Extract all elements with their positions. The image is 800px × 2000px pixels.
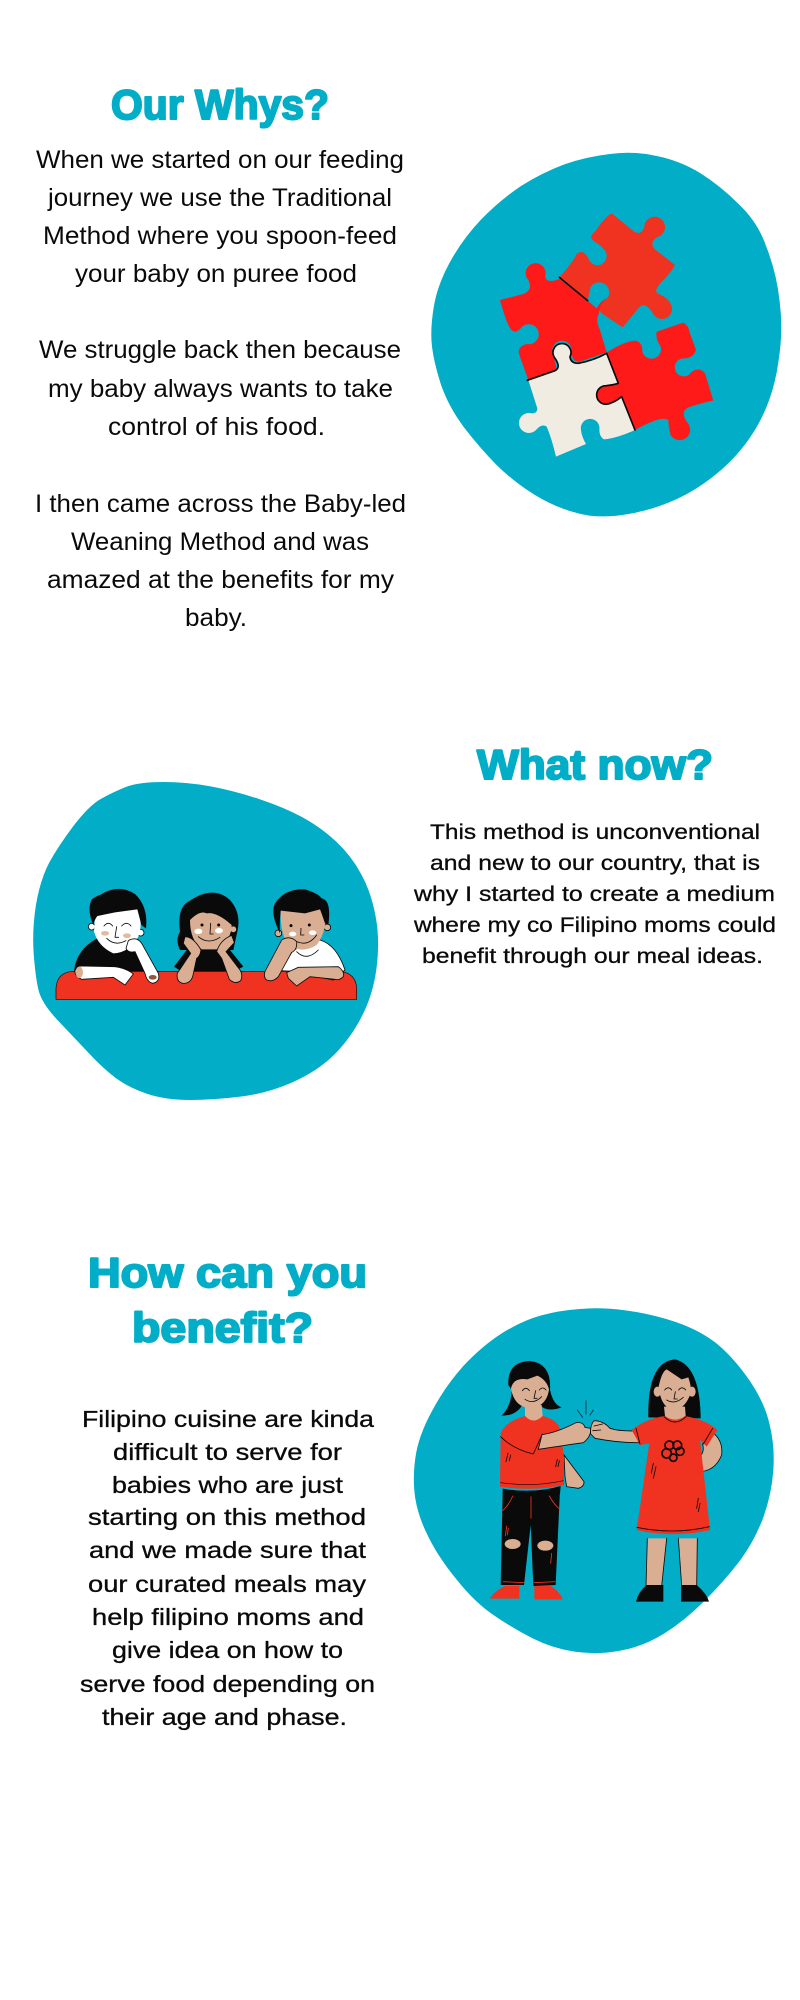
text block: our whys story: Method where you spoon-feed <box>43 222 397 250</box>
puzzle piece: orange <box>559 213 675 327</box>
text block: benefit description: babies who are just <box>112 1472 344 1498</box>
illustration: blob with three children <box>33 782 378 1100</box>
puzzle piece: red right <box>597 323 713 440</box>
child: boy right <box>264 889 345 986</box>
teal blob <box>431 153 781 516</box>
flower on the dress <box>662 1441 684 1461</box>
text block: our whys story: my baby always wants to take <box>48 375 393 403</box>
teal blob <box>33 782 378 1100</box>
text block: benefit description: our curated meals may <box>88 1571 367 1597</box>
teal blob <box>414 1308 774 1653</box>
text block: benefit description: their age and phase. <box>102 1704 347 1730</box>
puzzle seams <box>527 277 635 430</box>
text block: our whys story: When we started on our feeding <box>36 146 404 174</box>
text block: our whys story: journey we use the Traditional <box>47 184 392 212</box>
panel: our whys <box>35 81 781 632</box>
text block: benefit description: difficult to serve for <box>113 1439 342 1465</box>
text block: our whys story: I then came across the Baby-led <box>35 490 406 518</box>
text block: our whys story: your baby on puree food <box>75 260 357 288</box>
heading: How can you benefit?: How can you <box>88 1249 367 1296</box>
puzzle piece: cream <box>519 344 635 457</box>
text block: our whys story: amazed at the benefits for my <box>47 566 395 594</box>
girl right <box>591 1359 722 1602</box>
text block: benefit description: and we made sure that <box>89 1537 367 1563</box>
girl left <box>490 1361 591 1599</box>
text block: our whys story <box>35 146 406 632</box>
bench <box>56 971 357 999</box>
heading: How can you benefit? <box>88 1249 367 1351</box>
text block: our whys story: We struggle back then because <box>39 336 401 364</box>
text block: our whys story: control of his food. <box>108 413 325 441</box>
heading: How can you benefit?: benefit? <box>132 1304 313 1351</box>
child: boy left <box>74 889 159 985</box>
child: girl middle <box>174 893 243 983</box>
text block: our whys story: baby. <box>185 604 247 632</box>
text block: what now description: This method is unconventional <box>430 820 760 844</box>
illustration: blob with two girls fist-bumping <box>414 1308 774 1653</box>
heading: Our Whys?: Our Whys? <box>111 81 329 128</box>
text block: benefit description: help filipino moms and <box>92 1604 364 1630</box>
text block: what now description: and new to our country, that is <box>430 851 760 875</box>
text block: what now description: where my co Filipino moms could <box>413 913 776 937</box>
text block: what now description <box>413 820 776 968</box>
text block: benefit description: Filipino cuisine are kinda <box>82 1406 374 1432</box>
heading: What now?: What now? <box>477 741 713 788</box>
illustration: blob with puzzle pieces <box>431 153 781 516</box>
text block: what now description: why I started to create a medium <box>413 882 775 906</box>
puzzle piece: red top <box>500 263 608 380</box>
spark lines between the fists <box>577 1401 593 1417</box>
text block: benefit description <box>80 1406 375 1730</box>
text block: what now description: benefit through our meal ideas. <box>422 944 763 968</box>
panel: what now <box>33 741 776 1100</box>
panel: how can you benefit <box>80 1249 774 1730</box>
text block: our whys story: Weaning Method and was <box>71 528 369 556</box>
text block: benefit description: give idea on how to <box>112 1637 343 1663</box>
text block: benefit description: serve food depending on <box>80 1671 375 1697</box>
text block: benefit description: starting on this method <box>88 1504 366 1530</box>
